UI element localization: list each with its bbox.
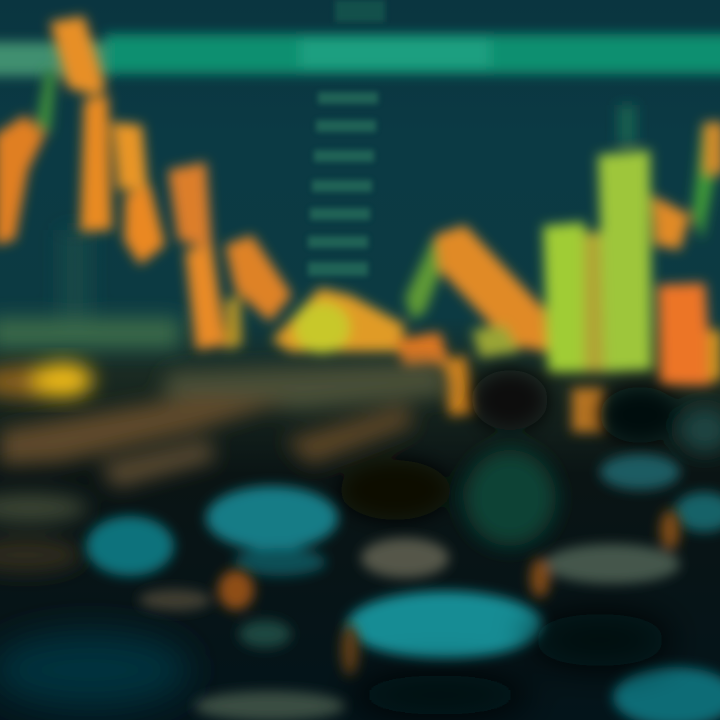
orange candlestick line	[0, 16, 720, 432]
grey and bronze coins in front	[139, 510, 680, 720]
coin field: dark and bronze piles	[0, 362, 720, 573]
glowing gold coin	[0, 362, 93, 398]
lime bars	[543, 222, 588, 372]
faint horizontal green strip on left	[0, 230, 180, 348]
descending section	[225, 235, 292, 322]
green rising wick	[405, 236, 446, 320]
left candles	[0, 115, 45, 245]
vertical ladder scale	[308, 0, 385, 276]
teal coins	[86, 454, 720, 720]
peak	[50, 16, 106, 96]
central yellow cluster	[272, 288, 405, 352]
dark foreground shadows	[0, 614, 670, 715]
horizontal green band	[0, 34, 720, 76]
right descending ridge	[435, 225, 548, 352]
green wick on peak	[36, 70, 56, 135]
tall candles	[80, 95, 112, 232]
